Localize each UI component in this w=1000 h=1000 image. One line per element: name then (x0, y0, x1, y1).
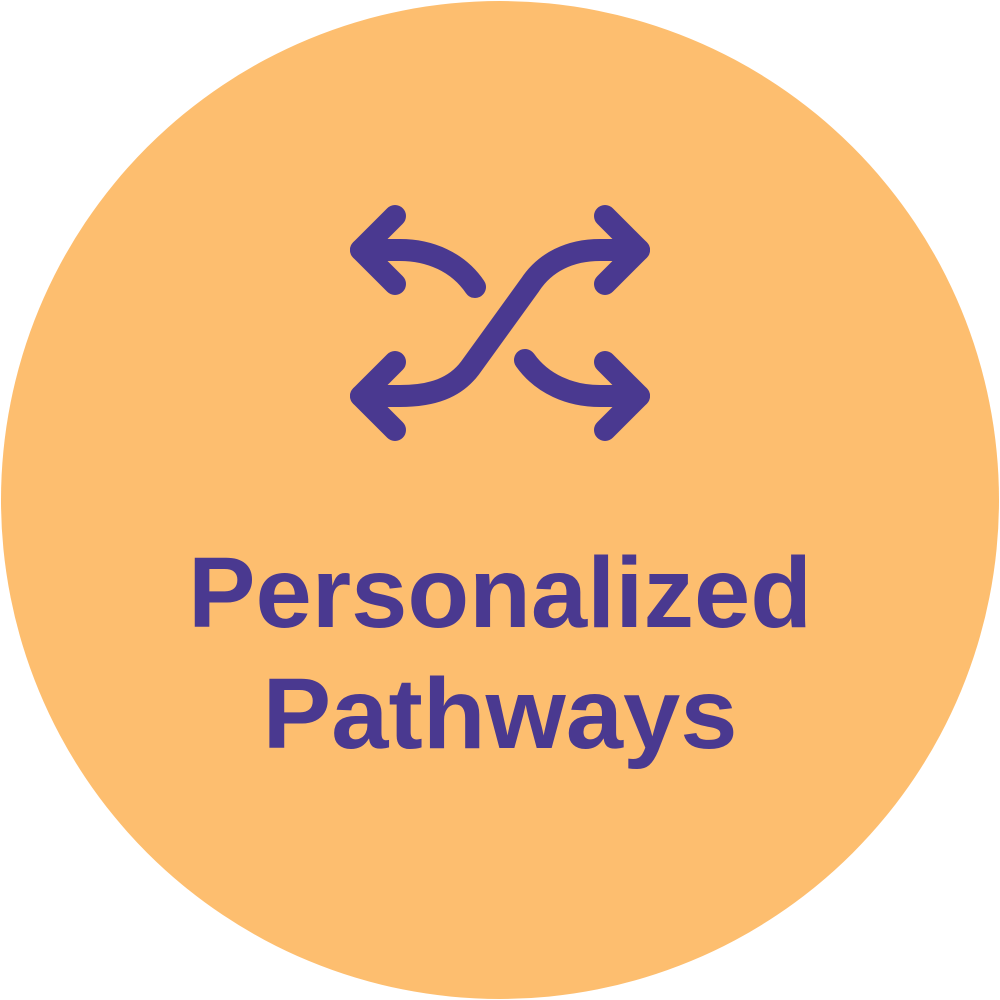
title: Pathways (262, 658, 738, 770)
title: Personalized (188, 537, 812, 649)
icon: crossing arrows (361, 216, 639, 430)
title (188, 537, 812, 770)
